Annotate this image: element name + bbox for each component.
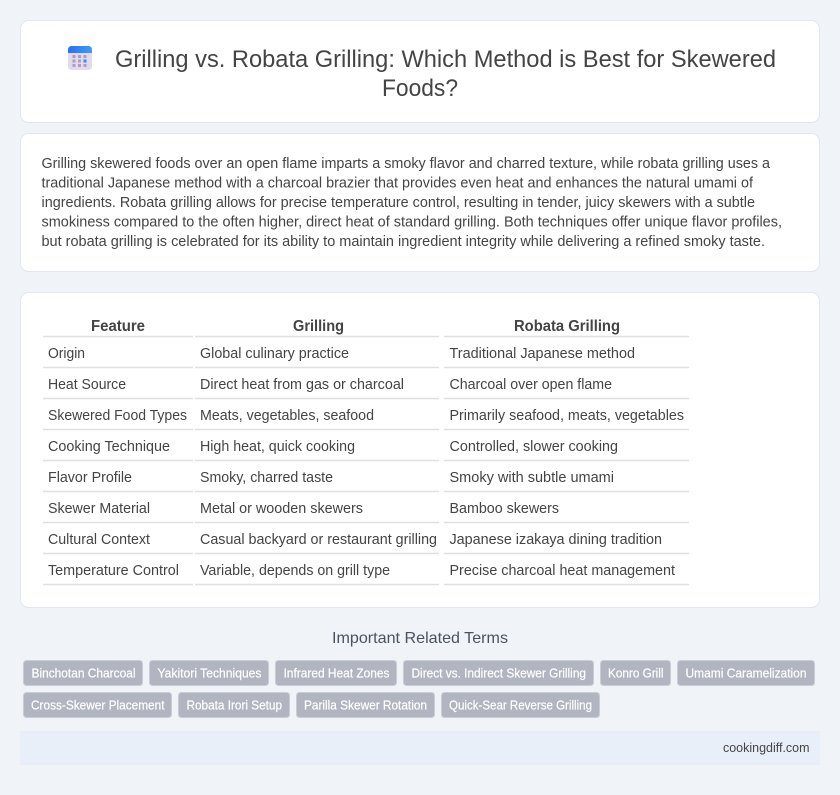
heading: important related terms: Important Related Terms	[332, 630, 508, 647]
description text: ingredients. Robata grilling allows for precise temperature control, resulting in tender, juicy skewers with a subtle	[42, 195, 755, 211]
tag: Umami Caramelization	[686, 666, 807, 680]
row: origin: Global culinary practice	[200, 346, 349, 362]
row: temperature control	[48, 563, 675, 579]
row: flavor profile: Flavor Profile	[48, 470, 132, 486]
panel: comparison table	[20, 292, 820, 608]
icon: calendar	[68, 46, 92, 70]
row: origin: Origin	[48, 346, 85, 362]
tag	[404, 660, 594, 686]
tag	[600, 660, 670, 686]
row: skewer material	[48, 501, 559, 517]
tag: Binchotan Charcoal	[32, 666, 136, 680]
tag: Yakitori Techniques	[158, 666, 262, 680]
tag	[276, 660, 396, 686]
row: temperature control: Temperature Control	[48, 563, 179, 579]
tag	[24, 692, 172, 718]
row: heat source	[48, 377, 612, 393]
row: cultural context	[48, 532, 662, 548]
row: skewered food types: Skewered Food Types	[48, 408, 187, 424]
description text	[42, 156, 782, 250]
tag	[178, 692, 290, 718]
row: cultural context: Casual backyard or restaurant grilling	[200, 532, 437, 548]
row: flavor profile	[48, 470, 614, 486]
tag	[24, 660, 142, 686]
panel: description	[20, 134, 820, 272]
row: skewered food types: Meats, vegetables, seafood	[200, 408, 374, 424]
title: Grilling vs. Robata Grilling: Which Method is Best for Skewered	[115, 46, 776, 73]
footer source text: cookingdiff.com	[723, 740, 810, 755]
row: origin	[48, 346, 635, 362]
row: cooking technique	[48, 439, 618, 455]
description text: traditional Japanese method with a charcoal brazier that provides even heat and enhances the natural umami of	[42, 176, 754, 192]
description text: Grilling skewered foods over an open flame imparts a smoky flavor and charred texture, while robata grilling uses a	[42, 156, 770, 172]
row: heat source: Heat Source	[48, 377, 126, 393]
row: skewer material: Bamboo skewers	[450, 501, 559, 517]
row: skewered food types: Primarily seafood, meats, vegetables	[450, 408, 684, 424]
table header row: Grilling	[293, 318, 344, 335]
title: Foods?	[382, 75, 458, 102]
row: temperature control: Precise charcoal heat management	[450, 563, 675, 579]
row: cooking technique: High heat, quick cooking	[200, 439, 355, 455]
tag: Konro Grill	[608, 666, 664, 680]
description text: but robata grilling is celebrated for its ability to maintain ingredient integrity while delivering a refined smoky taste.	[42, 234, 765, 250]
footer	[20, 731, 820, 765]
table header row: Robata Grilling	[514, 318, 620, 335]
tag: Robata Irori Setup	[186, 698, 282, 712]
description text: smokiness compared to the often higher, direct heat of standard grilling. Both techniques offer unique flavor profiles,	[42, 214, 782, 230]
tag: Parilla Skewer Rotation	[304, 698, 427, 712]
row: origin: Traditional Japanese method	[450, 346, 635, 362]
row: heat source: Charcoal over open flame	[450, 377, 612, 393]
row: cultural context: Japanese izakaya dining tradition	[450, 532, 662, 548]
tag	[678, 660, 814, 686]
tag: Cross-Skewer Placement	[31, 698, 165, 712]
tag: Infrared Heat Zones	[284, 666, 390, 680]
tag	[442, 692, 600, 718]
tag	[296, 692, 434, 718]
table header row	[91, 318, 620, 335]
related terms tags	[24, 660, 814, 718]
row: skewer material: Skewer Material	[48, 501, 150, 517]
tag: Direct vs. Indirect Skewer Grilling	[412, 666, 586, 680]
row: flavor profile: Smoky with subtle umami	[450, 470, 614, 486]
row: heat source: Direct heat from gas or charcoal	[200, 377, 404, 393]
row: cooking technique: Cooking Technique	[48, 439, 170, 455]
panel: header	[20, 20, 820, 122]
title	[115, 46, 776, 102]
row: temperature control: Variable, depends on grill type	[200, 563, 390, 579]
row: cooking technique: Controlled, slower cooking	[450, 439, 618, 455]
table header row: Feature	[91, 318, 145, 335]
tag	[150, 660, 268, 686]
row: skewer material: Metal or wooden skewers	[200, 501, 363, 517]
row: skewered food types	[48, 408, 684, 424]
tag: Quick-Sear Reverse Grilling	[449, 698, 592, 712]
row: flavor profile: Smoky, charred taste	[200, 470, 333, 486]
row: cultural context: Cultural Context	[48, 532, 150, 548]
